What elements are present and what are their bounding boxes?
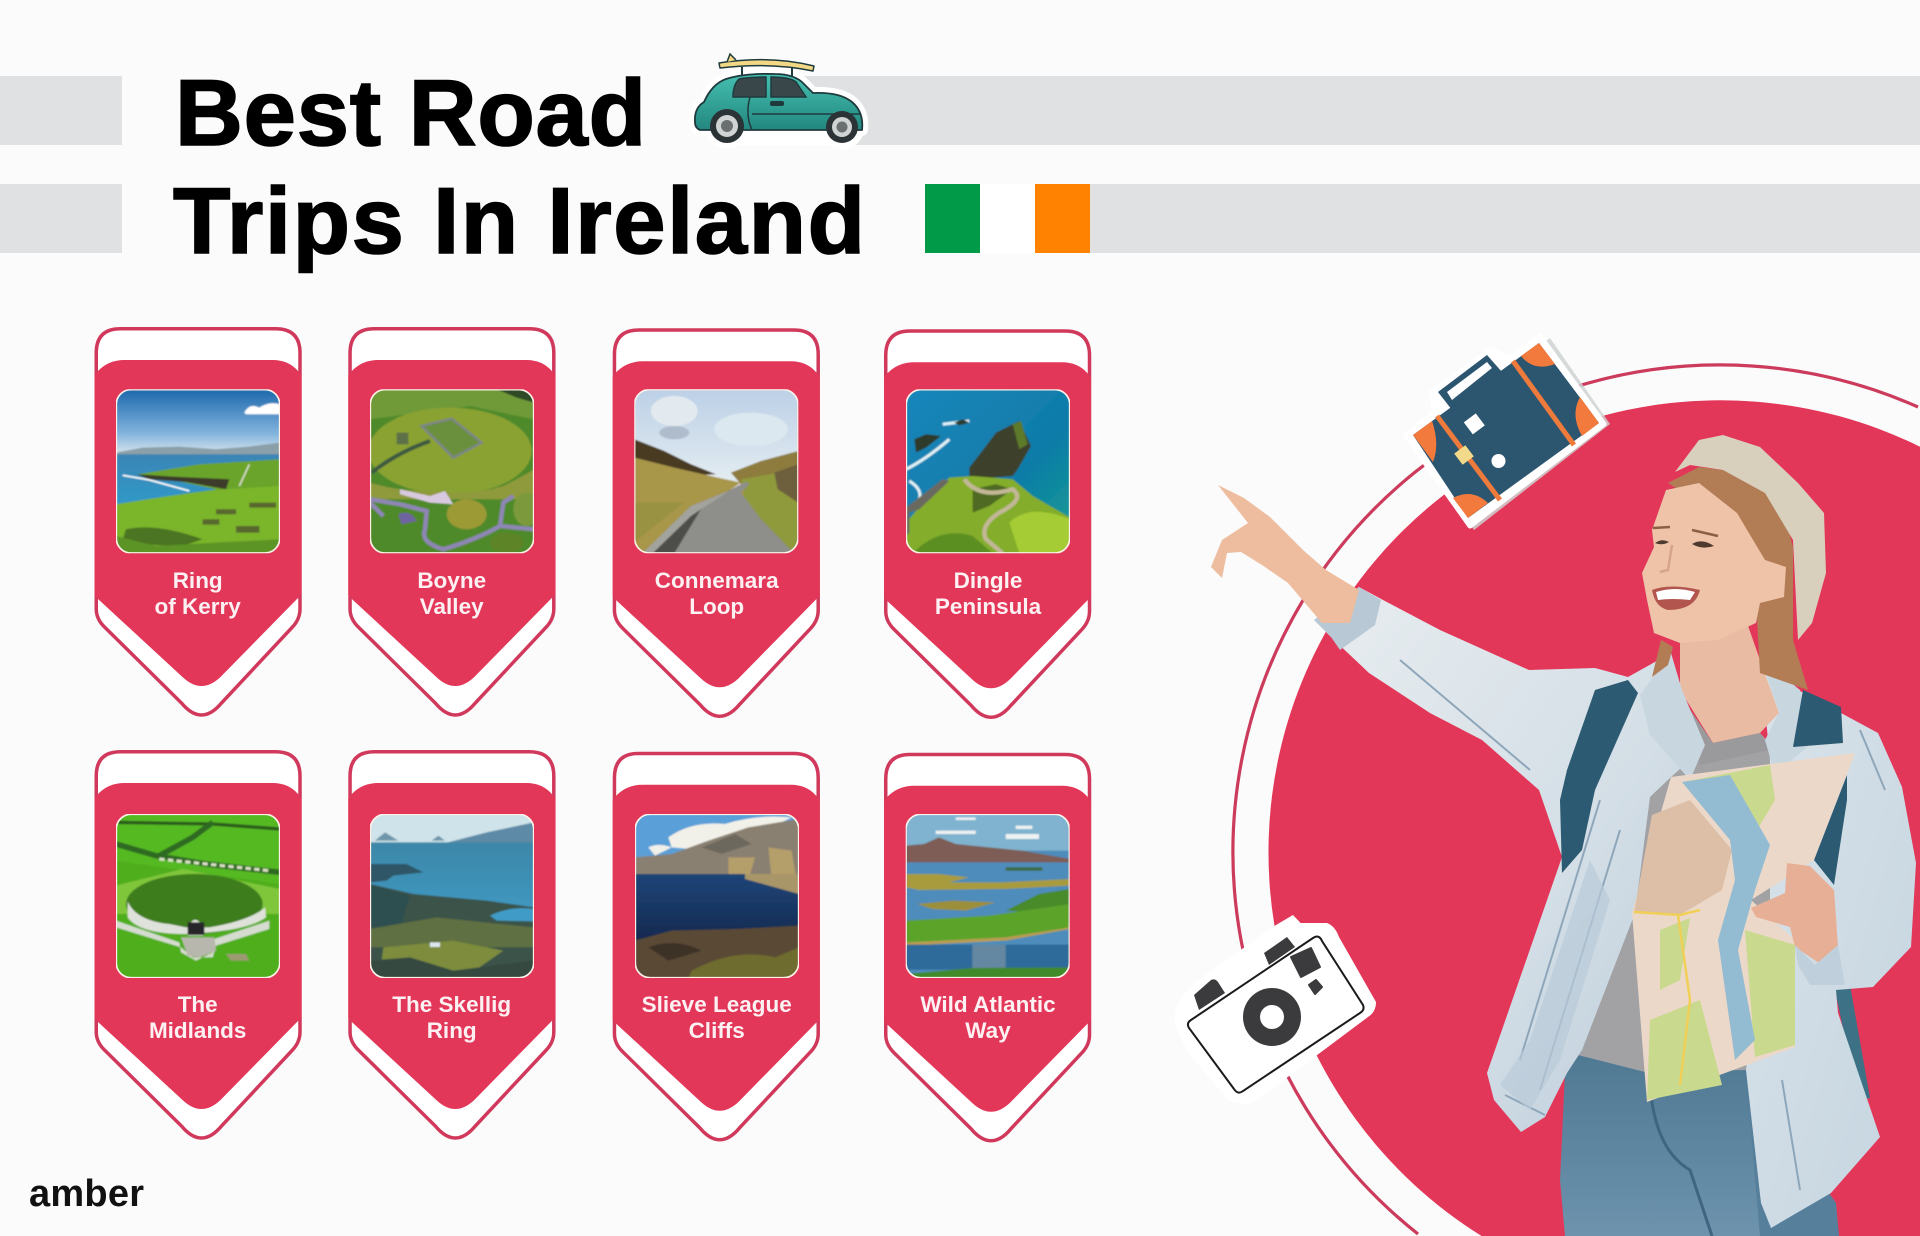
map roads	[1634, 910, 1700, 1085]
label: The Midlands: Midlands	[149, 1018, 246, 1043]
jeans	[1560, 1052, 1800, 1236]
left sleeve cuff	[1795, 945, 1845, 985]
shirt	[1570, 725, 1800, 1085]
label: The Skellig Ring: Ring	[427, 1018, 477, 1043]
panel: The Midlands	[94, 752, 302, 1138]
label: The Midlands: The	[178, 992, 218, 1017]
backpack left strap	[1560, 680, 1638, 873]
header bar: top left	[0, 76, 122, 145]
label: Dingle Peninsula: Peninsula	[935, 594, 1042, 619]
map upper tan area	[1634, 800, 1732, 915]
label: Dingle Peninsula: Dingle	[954, 568, 1022, 593]
header bar: bottom right	[1089, 184, 1920, 253]
jacket seams	[1400, 660, 1885, 1190]
map green areas	[1647, 765, 1795, 1100]
backpack lower right strap	[1814, 775, 1847, 885]
icon: car with surfboard	[695, 54, 864, 149]
neck and chest	[1680, 620, 1779, 743]
panel: Dingle Peninsula	[884, 331, 1091, 717]
panel: Connemara Loop	[613, 330, 820, 716]
icon: suitcase	[1406, 336, 1610, 530]
panel: The Skellig Ring	[348, 752, 555, 1138]
outer ring	[1233, 365, 1918, 1234]
label: Boyne Valley: Boyne	[417, 568, 486, 593]
logo: amber: amber	[29, 1173, 144, 1215]
hair	[1668, 467, 1808, 690]
label: Wild Atlantic Way: Way	[965, 1018, 1011, 1043]
jacket collar	[1640, 653, 1815, 780]
label: Slieve League Cliffs: Cliffs	[689, 1018, 745, 1043]
panel: Wild Atlantic Way	[884, 754, 1091, 1141]
backpack lower strap	[1834, 985, 1870, 1100]
hand holding map	[1751, 863, 1838, 963]
header bar: bottom left	[0, 184, 122, 253]
label: Slieve League Cliffs: Slieve League	[642, 992, 792, 1017]
title: Trips In Ireland	[173, 168, 865, 273]
red circle backdrop	[1268, 400, 1920, 1236]
panel: Boyne Valley	[348, 329, 555, 715]
backpack right strap	[1793, 690, 1843, 747]
label: Ring of Kerry: Ring	[173, 568, 223, 593]
title	[173, 60, 865, 273]
label: Wild Atlantic Way: Wild Atlantic	[920, 992, 1056, 1017]
panel: Slieve League Cliffs	[613, 753, 820, 1140]
hat	[1675, 435, 1826, 640]
eyebrows	[1653, 527, 1718, 536]
irish flag blocks	[925, 184, 1090, 253]
header bar: top right	[780, 76, 1920, 145]
map river	[1682, 775, 1770, 1060]
face	[1642, 483, 1786, 643]
label: The Skellig Ring: The Skellig	[392, 992, 511, 1017]
jacket left side and sleeve	[1314, 587, 1690, 1132]
jacket wash shading	[1500, 860, 1610, 1110]
panel: Ring of Kerry	[94, 329, 302, 715]
map	[1632, 753, 1855, 1102]
pointing arm and hand	[1211, 485, 1359, 623]
title: Best Road	[175, 60, 646, 165]
label: Boyne Valley: Valley	[420, 594, 484, 619]
jeans centre seam	[1650, 1085, 1712, 1236]
label: Connemara Loop: Loop	[689, 594, 744, 619]
person: traveller with map	[1211, 435, 1916, 1236]
mouth	[1652, 586, 1700, 610]
label: Ring of Kerry: of Kerry	[155, 594, 241, 619]
teeth	[1656, 589, 1695, 600]
icon: camera	[1174, 915, 1376, 1104]
label: Connemara Loop: Connemara	[655, 568, 779, 593]
grey collar of shirt	[1680, 695, 1770, 765]
nose shadow	[1660, 545, 1672, 572]
eyes	[1655, 540, 1714, 548]
jacket cuff	[1314, 587, 1381, 650]
hair left strand	[1652, 640, 1673, 677]
jeans right leg	[1746, 1075, 1839, 1236]
jacket right side and sleeve	[1746, 657, 1916, 1228]
